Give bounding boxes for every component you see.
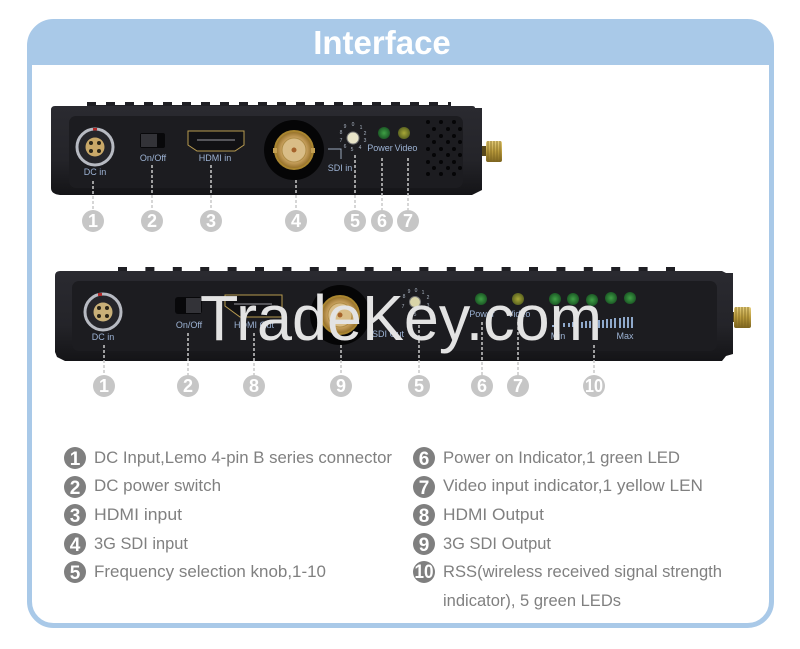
video LED, bottom — [508, 293, 530, 319]
frequency knob, bottom — [402, 288, 430, 318]
frequency knob, top — [340, 122, 367, 153]
power LED, top: Power — [367, 143, 393, 153]
legend item 4: 4 — [70, 535, 81, 556]
signal strength scale: Max — [616, 331, 634, 341]
legend item 1: 1 — [70, 449, 81, 470]
legend item 6: 6 — [419, 449, 429, 470]
watermark: TradeKey.com — [200, 282, 602, 354]
callout numbers, top: 2 — [147, 211, 157, 231]
frequency knob, top: 7 — [340, 138, 343, 144]
antenna connector, top device — [482, 141, 502, 162]
power LED, bottom — [469, 293, 495, 319]
callout numbers, bottom: 5 — [414, 376, 424, 396]
legend item 9 — [413, 533, 551, 556]
frequency knob, bottom: 5 — [414, 312, 417, 318]
legend item 5: 5 — [70, 563, 81, 584]
frequency knob, top: 4 — [359, 145, 362, 151]
power switch, top: On/Off — [140, 153, 167, 163]
legend item 5: Frequency selection knob,1-10 — [94, 562, 326, 581]
legend item 2: 2 — [70, 478, 80, 499]
frequency knob, top: 0 — [352, 122, 355, 128]
callout numbers, top: 7 — [403, 211, 413, 231]
callout numbers, bottom: 9 — [336, 376, 346, 396]
callout numbers, bottom: 2 — [183, 376, 193, 396]
legend item 3 — [64, 504, 182, 527]
legend item 3: HDMI input — [94, 505, 182, 524]
legend item 9: 3G SDI Output — [443, 534, 551, 553]
frequency knob, top: 5 — [351, 147, 354, 153]
DC in connector, top — [77, 128, 113, 177]
frequency knob, bottom: 1 — [422, 290, 425, 296]
callout numbers, top — [82, 210, 419, 232]
callout numbers, bottom: 6 — [477, 376, 487, 396]
signal strength scale: Min — [551, 331, 565, 341]
legend item 10: RSS(wireless received signal strength — [443, 562, 722, 581]
panel: bottom device — [55, 269, 751, 397]
callout numbers, top: 6 — [377, 211, 387, 231]
HDMI in port: HDMI in — [199, 153, 231, 163]
DC in connector, bottom: DC in — [92, 332, 114, 342]
callout numbers, top: 5 — [350, 211, 360, 231]
callout numbers, top: 4 — [291, 211, 301, 231]
frequency knob, bottom: 3 — [427, 303, 430, 309]
callout numbers, bottom: 8 — [249, 376, 259, 396]
power LED, bottom: Power — [469, 309, 495, 319]
legend item 4: 3G SDI input — [94, 534, 188, 553]
panel: top device — [51, 104, 502, 232]
frequency knob, top: 6 — [344, 144, 347, 150]
video LED, bottom: Video — [508, 309, 530, 319]
HDMI out port — [225, 295, 282, 330]
legend item 3: 3 — [70, 506, 80, 527]
video LED, top: Video — [395, 143, 417, 153]
legend item 6: Power on Indicator,1 green LED — [443, 448, 680, 467]
legend item 8: 8 — [419, 506, 429, 527]
antenna connector, bottom — [732, 307, 751, 328]
legend item 9: 9 — [419, 535, 429, 556]
callout lines, top — [93, 155, 408, 210]
legend item 2 — [64, 476, 221, 499]
legend item 10 — [413, 561, 722, 610]
legend: right column — [413, 447, 722, 610]
frequency knob, bottom: 9 — [408, 289, 411, 295]
SDI out connector: SDI Out — [372, 329, 405, 339]
frequency knob, bottom: 8 — [403, 294, 406, 300]
frequency knob, top: 8 — [340, 130, 343, 136]
frequency knob, top: 9 — [344, 124, 347, 130]
callout lines, bottom — [104, 320, 594, 375]
SDI out connector — [310, 285, 405, 345]
callout numbers, bottom: 10 — [585, 376, 603, 396]
legend item 10: 10 — [414, 562, 434, 583]
power LED, top — [367, 127, 393, 153]
device body, bottom — [55, 269, 733, 361]
callout numbers, top: 3 — [206, 211, 216, 231]
legend: left column — [64, 447, 392, 584]
SDI in connector — [264, 120, 352, 180]
frequency knob, bottom: 0 — [415, 288, 418, 294]
frequency knob, top: 1 — [360, 125, 363, 131]
RSS LEDs — [549, 292, 636, 306]
frequency knob, bottom: 2 — [427, 295, 430, 301]
HDMI in port — [188, 131, 244, 163]
legend item 2: DC power switch — [94, 476, 221, 495]
video LED, top — [395, 127, 417, 153]
legend item 7: Video input indicator,1 yellow LEN — [443, 476, 703, 495]
legend item 4 — [64, 533, 188, 556]
frequency knob, top: 3 — [364, 138, 367, 144]
callout numbers, bottom — [93, 375, 605, 397]
device body, top — [51, 104, 482, 195]
power switch, bottom — [175, 297, 203, 330]
legend item 7: 7 — [419, 478, 429, 499]
power switch, top — [140, 133, 167, 163]
legend item 8: HDMI Output — [443, 505, 544, 524]
title: Interface — [313, 24, 451, 61]
signal strength scale — [551, 317, 634, 341]
legend item 8 — [413, 504, 544, 527]
power switch, bottom: On/Off — [176, 320, 203, 330]
callout numbers, bottom: 7 — [513, 376, 523, 396]
DC in connector, top: DC in — [84, 167, 106, 177]
frequency knob, bottom: 7 — [402, 304, 405, 310]
speaker grille — [426, 120, 462, 176]
legend item 1: DC Input,Lemo 4-pin B series connector — [94, 448, 392, 467]
legend item 10: indicator), 5 green LEDs — [443, 591, 621, 610]
HDMI out port: HDMI Out — [234, 320, 274, 330]
callout numbers, top: 1 — [88, 211, 98, 231]
frequency knob, top: 2 — [364, 131, 367, 137]
callout numbers, bottom: 1 — [99, 376, 109, 396]
DC in connector, bottom — [85, 293, 121, 342]
SDI in connector: SDI in — [328, 163, 352, 173]
